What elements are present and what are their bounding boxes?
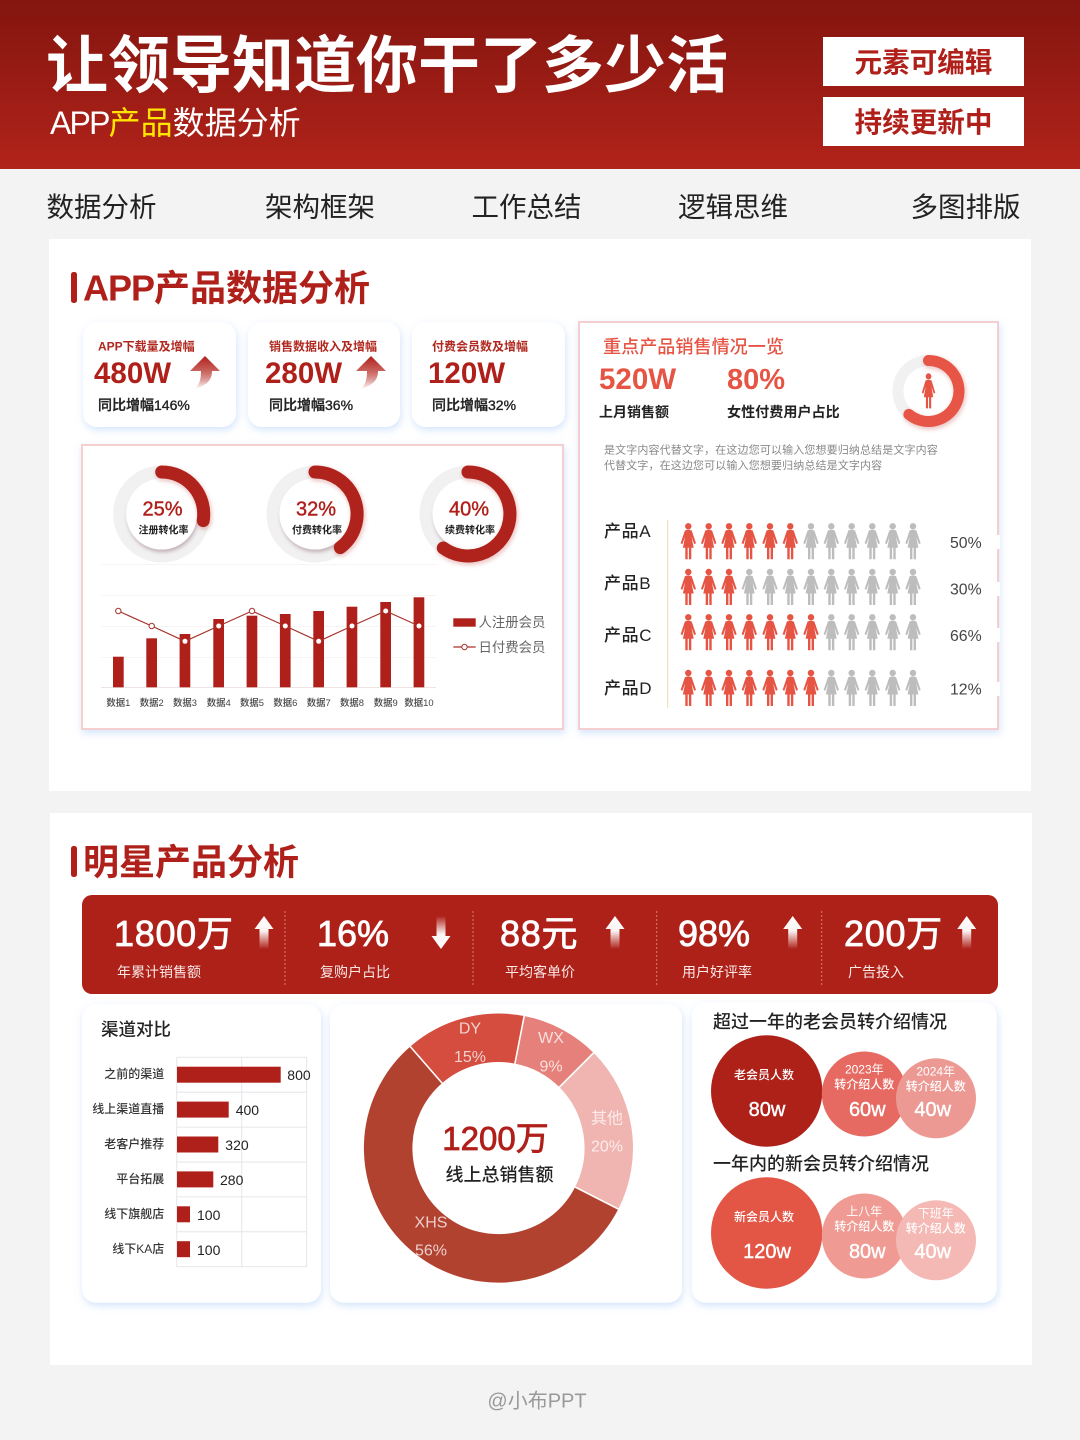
- stat: monthly sales: 520W: [599, 363, 676, 396]
- donut chart: DY: [459, 1020, 481, 1038]
- gauge: payment conversion: [273, 472, 357, 556]
- bubbles: new members: 40w: [914, 1241, 952, 1263]
- bubbles: new members: 120w: [743, 1241, 791, 1263]
- panel: star product analysis: [50, 813, 1032, 1365]
- pictogram row: product D: 产品D: [604, 679, 652, 698]
- bubbles: new members: 80w: [849, 1241, 886, 1263]
- pictogram row: product B: [604, 569, 982, 605]
- combo chart: members: 数据2: [140, 697, 164, 708]
- donut center value: 1200万: [442, 1120, 549, 1157]
- gauge: female share: [898, 360, 959, 422]
- button: editable elements: [823, 37, 1024, 86]
- donut chart: 9%: [539, 1058, 563, 1076]
- combo chart: members: 数据6: [273, 697, 297, 708]
- KPI card: downloads: [83, 322, 236, 427]
- KPI card: downloads: APP下载量及增幅: [98, 338, 195, 354]
- gauge: payment conversion: 32%: [296, 498, 336, 520]
- bubbles: existing members: [711, 1035, 976, 1147]
- KPI: average order value: [500, 913, 624, 980]
- donut chart: XHS: [415, 1214, 447, 1232]
- horizontal bar chart: 老客户推荐: [104, 1136, 164, 1151]
- gauge: payment conversion: 付费转化率: [292, 524, 342, 536]
- combo chart: members: 数据1: [106, 697, 130, 708]
- KPI card: paying members: [412, 322, 565, 427]
- KPI card: paying members: 付费会员数及增幅: [432, 338, 528, 354]
- section heading: 明星产品分析: [83, 842, 299, 882]
- gauge: registration conversion: 注册转化率: [138, 524, 188, 536]
- bubbles: existing members: 转介绍人数: [834, 1076, 894, 1092]
- pictogram row: product B: 30%: [950, 582, 982, 598]
- header banner: [0, 0, 1080, 169]
- bubbles: existing members: 60w: [849, 1099, 886, 1121]
- horizontal bar chart: 400: [236, 1102, 259, 1118]
- combo chart: members: [101, 564, 436, 708]
- navigation tabs: [46, 192, 1020, 222]
- panel: key product sales: [579, 322, 1000, 729]
- combo chart: members: 数据8: [340, 697, 364, 708]
- pictogram row: product D: 12%: [950, 682, 982, 698]
- KPI: positive rating: 98%: [678, 913, 750, 954]
- horizontal bar chart: 320: [225, 1137, 249, 1153]
- bubbles: existing members: 转介绍人数: [906, 1078, 966, 1094]
- horizontal bar chart: 280: [220, 1172, 244, 1188]
- stat: female share: [727, 364, 840, 420]
- button: continuously updated: 持续更新中: [855, 107, 992, 138]
- KPI: annual sales: 1800万: [114, 913, 234, 954]
- KPI: ad spend: 200万: [844, 913, 943, 954]
- horizontal bar chart: [92, 1057, 311, 1267]
- KPI band: [82, 895, 998, 994]
- combo chart: members: 数据3: [173, 697, 197, 708]
- navigation tabs: 工作总结: [472, 192, 582, 222]
- bubbles: existing members: 2024年: [916, 1064, 955, 1078]
- gauge: renewal conversion: [426, 472, 510, 556]
- bubbles: existing members: 40w: [914, 1099, 952, 1121]
- navigation tabs: 逻辑思维: [678, 192, 788, 222]
- combo chart: members: 数据10: [404, 697, 434, 708]
- donut center value: 线上总销售额: [446, 1165, 554, 1185]
- description text: [604, 442, 938, 472]
- combo chart: members: 数据4: [207, 697, 231, 708]
- bubbles: new members: 下班年: [918, 1206, 954, 1220]
- stat: monthly sales: [599, 363, 676, 420]
- KPI: annual sales: 年累计销售额: [117, 964, 201, 980]
- donut center value: [442, 1120, 554, 1185]
- KPI: repurchase share: 复购户占比: [320, 964, 390, 980]
- KPI card: revenue: 280W: [265, 357, 342, 390]
- button: editable elements: 元素可编辑: [855, 47, 992, 78]
- button: continuously updated: [823, 97, 1024, 146]
- KPI: positive rating: 用户好评率: [682, 964, 752, 980]
- KPI: repurchase share: [317, 913, 450, 980]
- bubbles: existing members: 老会员人数: [734, 1067, 794, 1082]
- donut chart: [388, 1016, 623, 1260]
- donut chart: 56%: [415, 1242, 447, 1260]
- navigation tabs: 数据分析: [46, 192, 156, 222]
- KPI card: downloads: 同比增幅146%: [98, 397, 190, 413]
- combo chart: members: 数据5: [240, 697, 264, 708]
- KPI: ad spend: [844, 913, 976, 980]
- panel: APP product analysis: [49, 239, 1031, 791]
- navigation tabs: 多图排版: [910, 192, 1020, 222]
- chart legend: 人注册会员: [478, 615, 545, 630]
- stat: monthly sales: 上月销售额: [599, 404, 669, 420]
- donut chart: 15%: [454, 1049, 486, 1066]
- title: 让领导知道你干了多少活: [46, 32, 728, 101]
- pictogram row: product A: 50%: [950, 535, 982, 552]
- horizontal bar chart: 线上渠道直播: [92, 1101, 164, 1116]
- chart legend: [453, 615, 545, 655]
- donut chart: 20%: [591, 1138, 623, 1156]
- KPI card: downloads: 480W: [94, 357, 171, 390]
- gauge: renewal conversion: 40%: [449, 498, 489, 520]
- KPI: average order value: 88元: [500, 913, 578, 954]
- horizontal bar chart: 800: [287, 1067, 311, 1083]
- pictogram row: product A: [604, 522, 982, 559]
- bubbles: existing members: 2023年: [845, 1062, 884, 1076]
- bubbles: existing members: 80w: [749, 1099, 786, 1121]
- donut chart: 其他: [591, 1110, 623, 1128]
- KPI: ad spend: 广告投入: [848, 964, 904, 980]
- combo chart: members: 数据9: [374, 697, 398, 708]
- horizontal bar chart: 线下KA店: [112, 1241, 164, 1256]
- KPI card: paying members: 同比增幅32%: [432, 397, 516, 413]
- bubbles: new members: 上八年: [846, 1204, 882, 1218]
- KPI card: paying members: 120W: [428, 357, 505, 390]
- panel: member referrals: [692, 1002, 997, 1303]
- horizontal bar chart: 线下旗舰店: [104, 1206, 164, 1221]
- KPI card: revenue: [248, 322, 400, 427]
- panel: channel comparison: 渠道对比: [101, 1020, 171, 1040]
- horizontal bar chart: 平台拓展: [116, 1171, 164, 1186]
- horizontal bar chart: 100: [197, 1242, 221, 1258]
- bubbles: new members: 转介绍人数: [834, 1218, 894, 1234]
- panel: online sales donut: [330, 1004, 682, 1303]
- panel: conversion and members chart: [82, 445, 563, 729]
- navigation tabs: 架构框架: [265, 192, 375, 222]
- footer credit: @小布PPT: [487, 1390, 587, 1412]
- stat: female share: 80%: [727, 364, 785, 396]
- pictogram row: product B: 产品B: [604, 574, 651, 593]
- bubbles: new members: [711, 1177, 976, 1289]
- panel: channel comparison: [82, 1004, 321, 1303]
- section heading: APP产品数据分析: [83, 268, 370, 308]
- KPI: repurchase share: 16%: [317, 913, 389, 954]
- description text: 是文字内容代替文字，在这边您可以输入您想要归纳总结是文字内容: [604, 442, 938, 456]
- combo chart: members: 数据7: [307, 697, 331, 708]
- KPI card: revenue: 销售数据收入及增幅: [269, 338, 377, 354]
- gauge: renewal conversion: 续费转化率: [445, 524, 495, 536]
- pictogram row: product C: 产品C: [604, 626, 652, 645]
- gauge: registration conversion: [120, 472, 204, 556]
- gauge: registration conversion: 25%: [142, 498, 183, 520]
- KPI card: revenue: 同比增幅36%: [269, 397, 353, 413]
- heading: new members: 一年内的新会员转介绍情况: [713, 1154, 929, 1174]
- description text: 代替文字，在这边您可以输入您想要归纳总结是文字内容: [604, 458, 882, 472]
- panel heading: 重点产品销售情况一览: [603, 337, 784, 357]
- pictogram row: product C: [604, 614, 982, 650]
- subtitle: APP产品数据分析: [50, 105, 301, 141]
- pictogram row: product D: [604, 670, 982, 706]
- stat: female share: 女性付费用户占比: [727, 404, 840, 420]
- heading: existing members: 超过一年的老会员转介绍情况: [713, 1012, 947, 1032]
- pictogram row: product C: 66%: [950, 628, 982, 645]
- bubbles: new members: 新会员人数: [734, 1209, 794, 1224]
- donut chart: WX: [538, 1030, 564, 1047]
- pictogram row: product A: 产品A: [604, 522, 651, 541]
- KPI: average order value: 平均客单价: [505, 964, 575, 980]
- bubbles: new members: 转介绍人数: [906, 1220, 966, 1236]
- horizontal bar chart: 之前的渠道: [104, 1066, 164, 1081]
- horizontal bar chart: 100: [197, 1207, 221, 1223]
- KPI: positive rating: [678, 913, 802, 980]
- chart legend: 日付费会员: [478, 640, 545, 655]
- KPI: annual sales: [114, 913, 274, 980]
